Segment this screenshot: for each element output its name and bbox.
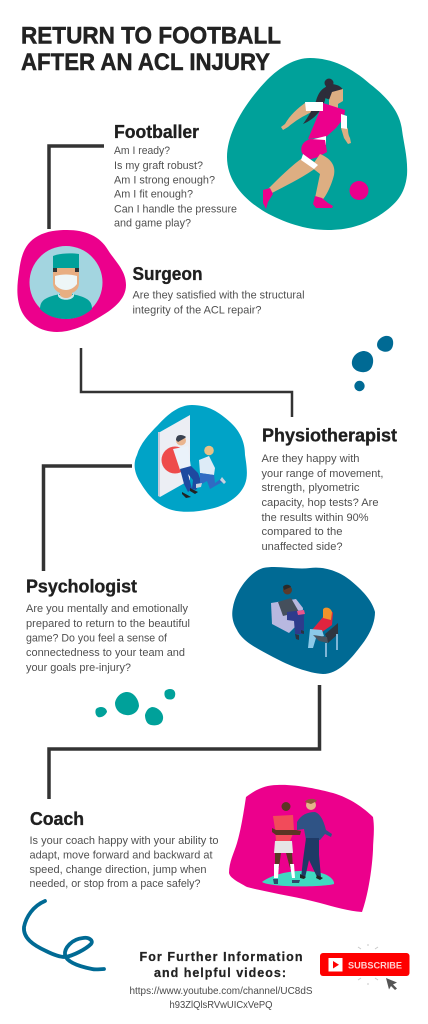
panel: footballer text: Am I fit enough? bbox=[114, 188, 193, 200]
panel: further information: and helpful videos: bbox=[154, 966, 286, 980]
connector: psychologist to coach bbox=[49, 685, 320, 799]
panel: psychologist text: Psychologist bbox=[26, 576, 137, 596]
panel: physiotherapist text: Physiotherapist bbox=[262, 426, 397, 446]
icon: physiotherapist and patient bbox=[158, 415, 226, 498]
panel: footballer text: Am I ready? bbox=[114, 145, 170, 157]
panel: surgeon text: Are they satisfied with the structural bbox=[132, 290, 304, 302]
icon: subscribe button: SUBSCRIBE bbox=[348, 960, 402, 972]
icon: football player bbox=[263, 78, 368, 209]
panel: physiotherapist text bbox=[262, 426, 397, 553]
panel: surgeon text: Surgeon bbox=[132, 264, 202, 284]
panel: physiotherapist illustration bbox=[135, 405, 247, 512]
panel: physiotherapist text: the results within 90% bbox=[262, 512, 368, 524]
panel: coach text: needed, or stop from a pace safely? bbox=[30, 878, 200, 890]
panel: footballer text: Can I handle the pressure bbox=[114, 204, 237, 216]
panel: footballer text: Footballer bbox=[114, 122, 199, 142]
panel: surgeon text: integrity of the ACL repair? bbox=[132, 304, 262, 316]
panel: surgeon text bbox=[132, 264, 304, 316]
icon: subscribe button bbox=[320, 944, 410, 990]
connector: footballer to surgeon bbox=[49, 146, 104, 229]
panel: coach text bbox=[30, 809, 218, 890]
panel: psychologist illustration bbox=[232, 567, 375, 674]
panel: psychologist text: Are you mentally and emotionally bbox=[26, 603, 188, 615]
icon: coach and player bbox=[262, 799, 334, 886]
panel: physiotherapist text: strength, plyometric bbox=[262, 482, 360, 494]
panel: psychologist text: connectedness to your team and bbox=[26, 647, 185, 659]
panel: footballer illustration bbox=[227, 58, 407, 230]
title: RETURN TO FOOTBALL bbox=[21, 22, 281, 50]
icon: surgeon bbox=[40, 253, 92, 319]
icon: counselling session bbox=[271, 585, 338, 657]
panel: surgeon illustration bbox=[17, 230, 126, 332]
panel: physiotherapist text: unaffected side? bbox=[262, 541, 342, 553]
panel: psychologist text: prepared to return to the beautiful bbox=[26, 618, 190, 630]
panel: psychologist text: game? Do you feel a sense of bbox=[26, 632, 168, 644]
panel: physiotherapist text: compared to the bbox=[262, 526, 342, 538]
connector: surgeon to physiotherapist bbox=[81, 348, 292, 417]
panel: further information: For Further Information bbox=[140, 950, 302, 964]
panel: psychologist text: your goals pre-injury? bbox=[26, 662, 131, 674]
panel: further information: https://www.youtube.com/channel/UC8dS bbox=[130, 985, 312, 997]
connector: physiotherapist to psychologist bbox=[44, 466, 132, 571]
panel: footballer text: and game play? bbox=[114, 218, 191, 230]
panel: coach text: adapt, move forward and backward at bbox=[30, 850, 213, 862]
panel: further information bbox=[130, 950, 312, 1011]
panel: physiotherapist text: your range of movement, bbox=[262, 468, 384, 480]
panel: physiotherapist text: Are they happy with bbox=[262, 453, 360, 465]
panel: footballer text bbox=[114, 122, 237, 230]
panel: footballer text: Is my graft robust? bbox=[114, 160, 203, 172]
panel: coach text: Is your coach happy with your ability to bbox=[30, 835, 218, 847]
decoration: blue dots bbox=[352, 336, 393, 391]
panel: further information: h93ZlQlsRVwUICxVePQ bbox=[170, 999, 272, 1011]
title: AFTER AN ACL INJURY bbox=[21, 49, 270, 76]
panel: footballer text: Am I strong enough? bbox=[114, 174, 215, 186]
panel: psychologist text bbox=[26, 576, 190, 674]
panel: coach text: speed, change direction, jump when bbox=[30, 864, 206, 876]
panel: coach illustration bbox=[229, 785, 374, 912]
panel: physiotherapist text: capacity, hop tests? Are bbox=[262, 497, 378, 509]
title bbox=[21, 22, 281, 76]
panel: coach text: Coach bbox=[30, 809, 84, 829]
decoration: teal dots bbox=[95, 689, 175, 725]
icon: cursor bbox=[386, 978, 397, 990]
decoration: blue squiggle bbox=[24, 901, 104, 969]
